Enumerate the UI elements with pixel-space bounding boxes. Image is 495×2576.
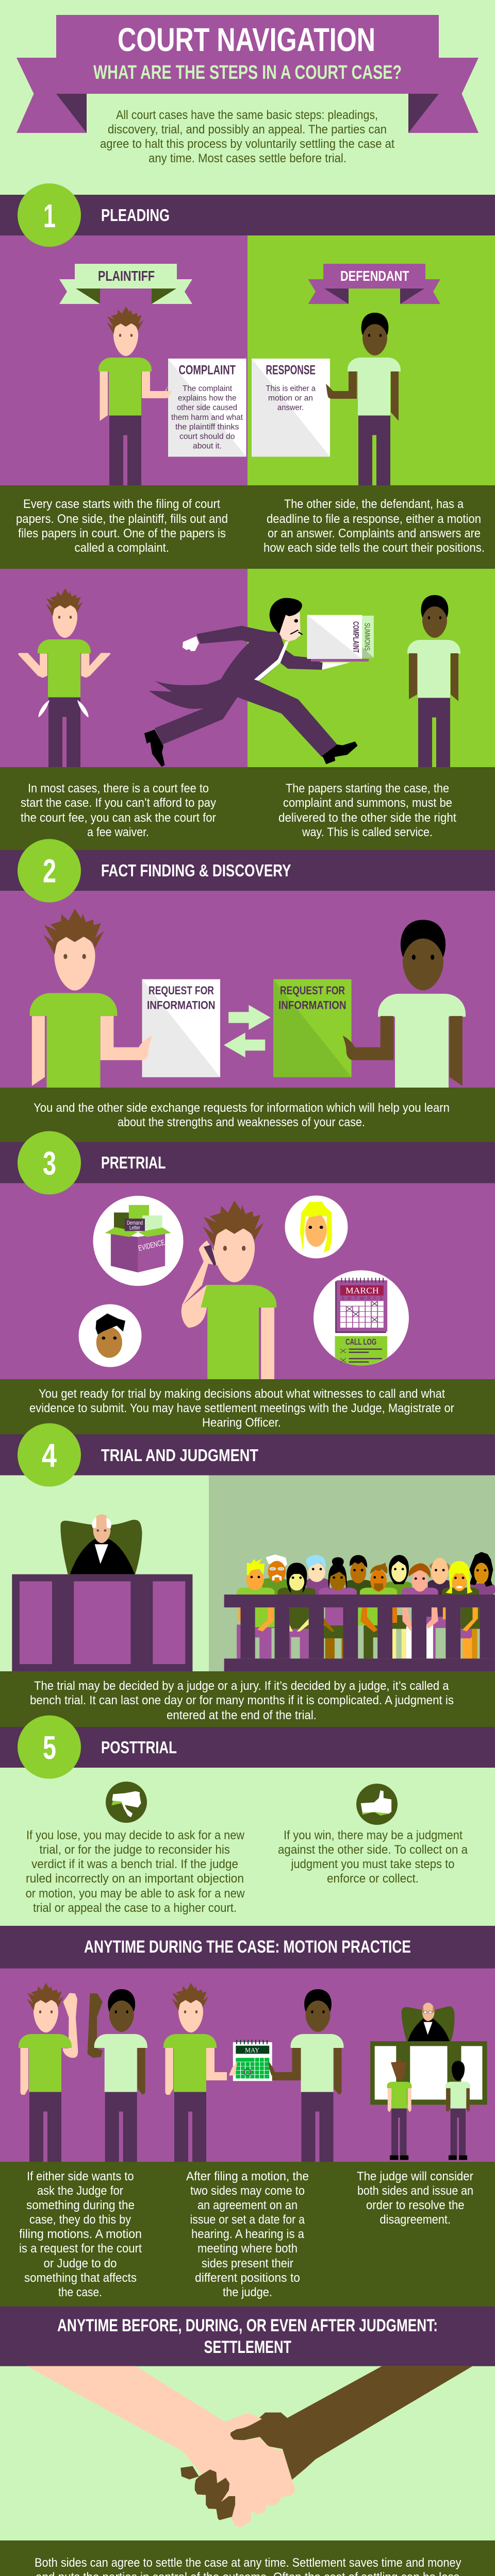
motion text column 2: the judge. [223, 2285, 272, 2299]
motion text column 2: different positions to [195, 2271, 300, 2285]
arm and hand left [101, 1016, 152, 1060]
panel: jury background [209, 1475, 495, 1671]
lose text: trial or appeal the case to a higher court. [33, 1901, 237, 1915]
complaint document [168, 359, 246, 456]
defendant ribbon: DEFENDANT [340, 268, 409, 284]
motion text column 2: After filing a motion, the [186, 2170, 309, 2183]
motion text column 1: or Judge to do [43, 2257, 117, 2270]
plaintiff text: Every case starts with the filing of court [23, 497, 220, 511]
request document green: INFORMATION [278, 999, 346, 1012]
response document [252, 359, 330, 456]
service text: The papers starting the case, the [286, 782, 449, 795]
panel: service background [248, 569, 495, 767]
step 3 heading: PRETRIAL [101, 1153, 166, 1172]
motion practice heading band [0, 1926, 495, 1969]
calendar and call log circle: S M T W R F S [341, 1296, 383, 1301]
step 5 number: 5 [43, 1729, 56, 1766]
panel: fee waiver background [0, 569, 248, 767]
defendant text: The other side, the defendant, has a [284, 497, 464, 511]
settlement text band [0, 2540, 495, 2576]
step 3 circle [18, 1131, 81, 1194]
motion text column 2: sides present their [202, 2257, 293, 2270]
motion text column 3: both sides and issue an [357, 2184, 473, 2198]
settlement text: Both sides can agree to settle the case at any time. Settlement saves time and money [35, 2556, 461, 2570]
step 3 heading band [0, 1142, 495, 1183]
panel: plaintiff background [0, 235, 248, 485]
motion text column 3: disagreement. [380, 2213, 451, 2227]
motion text column 1 [19, 2170, 142, 2299]
service text: delivered to the other side the right [278, 811, 456, 825]
response document: motion or an [268, 394, 313, 403]
service text: complaint and summons, must be [283, 796, 452, 810]
pretrial text: You get ready for trial by making decisions about what witnesses to call and what [39, 1387, 445, 1401]
complaint document: other side caused [177, 403, 237, 412]
step 1 circle [18, 183, 81, 247]
defendant ribbon [308, 264, 440, 304]
evidence circle [93, 1196, 184, 1286]
subtitle: WHAT ARE THE STEPS IN A COURT CASE? [93, 62, 402, 83]
discovery text band [0, 1088, 495, 1142]
request document green [273, 979, 352, 1077]
win text: against the other side. To collect on a [278, 1843, 468, 1857]
motion text column 3: The judge will consider [357, 2170, 473, 2183]
lose text: If you lose, you may decide to ask for a new [26, 1828, 245, 1842]
settlement heading band [0, 2307, 495, 2366]
calendar and call log circle [314, 1270, 409, 1365]
request document white: REQUEST FOR [148, 984, 214, 997]
step 4 number: 4 [42, 1437, 57, 1474]
panel: pretrial background [0, 1183, 495, 1379]
panel: judge background [0, 1475, 209, 1671]
motion text column 1: If either side wants to [27, 2170, 134, 2183]
evidence circle: Demand [127, 1220, 143, 1226]
running process server [144, 598, 374, 767]
juror front row heads [246, 1557, 472, 1594]
fee and service text band [0, 767, 495, 850]
witness circle: dark haired man [78, 1304, 141, 1367]
motion text column 1: is a request for the court [19, 2242, 142, 2256]
trial text: bench trial. It can last one day or for many months if it is complicated. A judgment is [30, 1693, 454, 1707]
front row shirts [237, 1588, 479, 1595]
motion text column 1: case, they do this by [29, 2213, 131, 2227]
agreed hearing calendar [229, 2040, 276, 2081]
papers label: complaint: COMPLAINT [351, 621, 360, 653]
service text [278, 782, 456, 839]
intro text: All court cases have the same basic steps: pleadings, [116, 108, 378, 122]
pretrial text: Hearing Officer. [202, 1416, 281, 1430]
win text: enforce or collect. [327, 1872, 419, 1886]
discovery text [34, 1101, 450, 1129]
complaint document: the plaintiff thinks [175, 422, 239, 432]
complaint document: court should do [179, 432, 235, 441]
step 5 circle [18, 1716, 81, 1778]
trial text: The trial may be decided by a judge or a jury. If it’s decided by a judge, it’s called a [34, 1679, 449, 1693]
defendant text [263, 497, 485, 555]
plaintiff text: papers. One side, the plaintiff, fills out and [16, 512, 228, 526]
fee waiver text: In most cases, there is a court fee to [28, 782, 209, 795]
complaint document: about it. [193, 442, 222, 451]
calendar and call log circle: CALL LOG [345, 1337, 376, 1347]
response document: This is either a [266, 384, 316, 393]
complaint document: COMPLAINT [178, 363, 236, 377]
request document green: REQUEST FOR [280, 984, 345, 997]
step 4 circle [18, 1423, 81, 1487]
motion text column 1: something that affects [24, 2271, 137, 2285]
figure: defendant raising hand [88, 1989, 147, 2175]
exchange arrow right [228, 1005, 271, 1030]
step 2 number: 2 [43, 852, 56, 889]
request document white: INFORMATION [147, 999, 216, 1012]
jury box [224, 1552, 495, 1671]
discovery text: You and the other side exchange requests for information which will help you learn [34, 1101, 450, 1115]
discovery text: about the strengths and weaknesses of your case. [118, 1115, 365, 1129]
pretrial text [29, 1387, 454, 1430]
response document: answer. [277, 403, 304, 412]
step 1 heading: PLEADING [101, 206, 170, 225]
defendant arm holding paper [326, 371, 357, 399]
step 5 heading band [0, 1727, 495, 1768]
exchange arrow left [224, 1032, 265, 1057]
panel: discovery background [0, 891, 495, 1088]
lose text: ruled incorrectly on an important objection [26, 1872, 244, 1886]
evidence circle: Letter [129, 1225, 140, 1231]
settlement text [35, 2556, 461, 2576]
trial text band [0, 1671, 495, 1727]
plaintiff text band [0, 485, 495, 569]
judge at bench [12, 1514, 192, 1671]
icon: thumbs down [106, 1782, 147, 1823]
handshake [27, 2366, 472, 2527]
response document: RESPONSE [266, 363, 316, 377]
motion text column 2: issue or set a date for a [190, 2213, 305, 2227]
title: COURT NAVIGATION [118, 21, 375, 58]
motion text column 1: something during the [26, 2198, 135, 2212]
motion text column 2: meeting where both [197, 2242, 298, 2256]
panel: motion practice background [0, 1969, 495, 2162]
complaint document: explains how the [178, 394, 236, 403]
service text: way. This is called service. [302, 825, 433, 839]
witness circle: blonde woman [285, 1195, 348, 1258]
motion text column 2 [186, 2170, 309, 2299]
lose text: or motion, you may be able to ask for a new [26, 1887, 245, 1901]
motion text column 3: order to resolve the [366, 2198, 465, 2212]
request document white [142, 979, 220, 1077]
juror eyes [250, 1568, 486, 1580]
back row shirts [262, 1578, 495, 1596]
fee waiver text: a fee waiver. [87, 825, 149, 839]
juror back row heads [266, 1552, 493, 1587]
fee waiver text: the court fee, you can ask the court for [21, 811, 216, 825]
win text: judgment you must take steps to [291, 1857, 455, 1871]
motion text column 3 [357, 2170, 473, 2227]
fee waiver text [21, 782, 216, 839]
large defendant figure [378, 920, 466, 1090]
complaint document: them harm and what [171, 413, 243, 422]
step 4 heading band [0, 1434, 495, 1476]
railing [224, 1595, 495, 1671]
intro text: agree to halt this process by voluntarily settling the case at [100, 137, 394, 151]
title ribbon [16, 15, 478, 133]
plaintiff text [16, 497, 228, 555]
motion text column 2: two sides may come to [190, 2184, 305, 2198]
plaintiff ribbon: PLAINTIFF [98, 268, 155, 284]
step 2 heading band [0, 850, 495, 891]
step 5 heading: POSTTRIAL [101, 1738, 177, 1757]
motion text column 2: an agreement on an [197, 2198, 298, 2212]
motion text column 1: ask the Judge for [37, 2184, 123, 2198]
agreed hearing calendar: MAY [245, 2046, 260, 2054]
small defendant from behind [446, 2061, 470, 2160]
icon: thumbs up [356, 1784, 398, 1825]
intro text: any time. Most cases settle before trial. [148, 151, 346, 165]
step 1 heading band [0, 195, 495, 235]
figure: plaintiff with calendar [163, 1983, 227, 2175]
win text [278, 1828, 468, 1886]
trial text [30, 1679, 454, 1722]
win text: If you win, there may be a judgment [284, 1828, 463, 1842]
defendant text: deadline to file a response, either a motion [267, 512, 481, 526]
figure with empty pockets [18, 588, 110, 781]
pretrial text: evidence to submit. You may have settlement meetings with the Judge, Magistrate or [29, 1401, 454, 1415]
motion text column 2: hearing. A hearing is a [191, 2227, 305, 2241]
complaint document: The complaint [183, 384, 233, 393]
large plaintiff figure [30, 909, 118, 1089]
motion text column 1: the case. [58, 2285, 102, 2299]
settlement heading [57, 2316, 438, 2357]
judge considering both sides [370, 2003, 487, 2105]
plaintiff figure [98, 307, 152, 499]
lose text: trial, or for the judge to reconsider his [39, 1843, 230, 1857]
step 3 number: 3 [43, 1145, 56, 1182]
defendant figure [348, 313, 401, 499]
figure: plaintiff raising hand [19, 1983, 78, 2175]
jurors legs behind railing [237, 1607, 480, 1658]
plaintiff arm holding paper [142, 371, 172, 398]
step 4 heading: TRIAL AND JUDGMENT [101, 1446, 258, 1465]
lose text [26, 1828, 245, 1915]
motion text column 1: filing motions. A motion [19, 2227, 142, 2241]
panel: defendant background [248, 235, 495, 485]
step 2 circle [18, 839, 81, 903]
pretrial text band [0, 1379, 495, 1435]
figure: defendant with calendar [270, 1989, 343, 2175]
settlement heading: SETTLEMENT [204, 2337, 291, 2357]
small plaintiff from behind [387, 2058, 411, 2160]
plaintiff text: files papers in court. One of the papers is [18, 527, 226, 540]
motion practice heading: ANYTIME DURING THE CASE: MOTION PRACTICE [84, 1937, 411, 1957]
lose text: verdict if it was a bench trial. If the judge [31, 1857, 238, 1871]
step 2 heading: FACT FINDING & DISCOVERY [101, 861, 291, 880]
figure on the phone [182, 1200, 276, 1379]
papers label: summons: SUMMONS [363, 623, 371, 651]
intro text: discovery, trial, and possibly an appeal. The parties can [108, 123, 387, 137]
intro text [100, 108, 394, 165]
plaintiff text: called a complaint. [74, 541, 169, 555]
trial text: entered at the end of the trial. [167, 1708, 317, 1722]
motion text band [0, 2162, 495, 2307]
evidence circle: EVIDENCE [137, 1238, 166, 1253]
plaintiff ribbon [59, 264, 192, 304]
step 1 number: 1 [43, 197, 56, 234]
fee waiver text: start the case. If you can’t afford to pay [21, 796, 216, 810]
calendar and call log circle: MARCH [345, 1286, 379, 1296]
arm and hand right [343, 1016, 393, 1060]
defendant standing [407, 595, 460, 781]
